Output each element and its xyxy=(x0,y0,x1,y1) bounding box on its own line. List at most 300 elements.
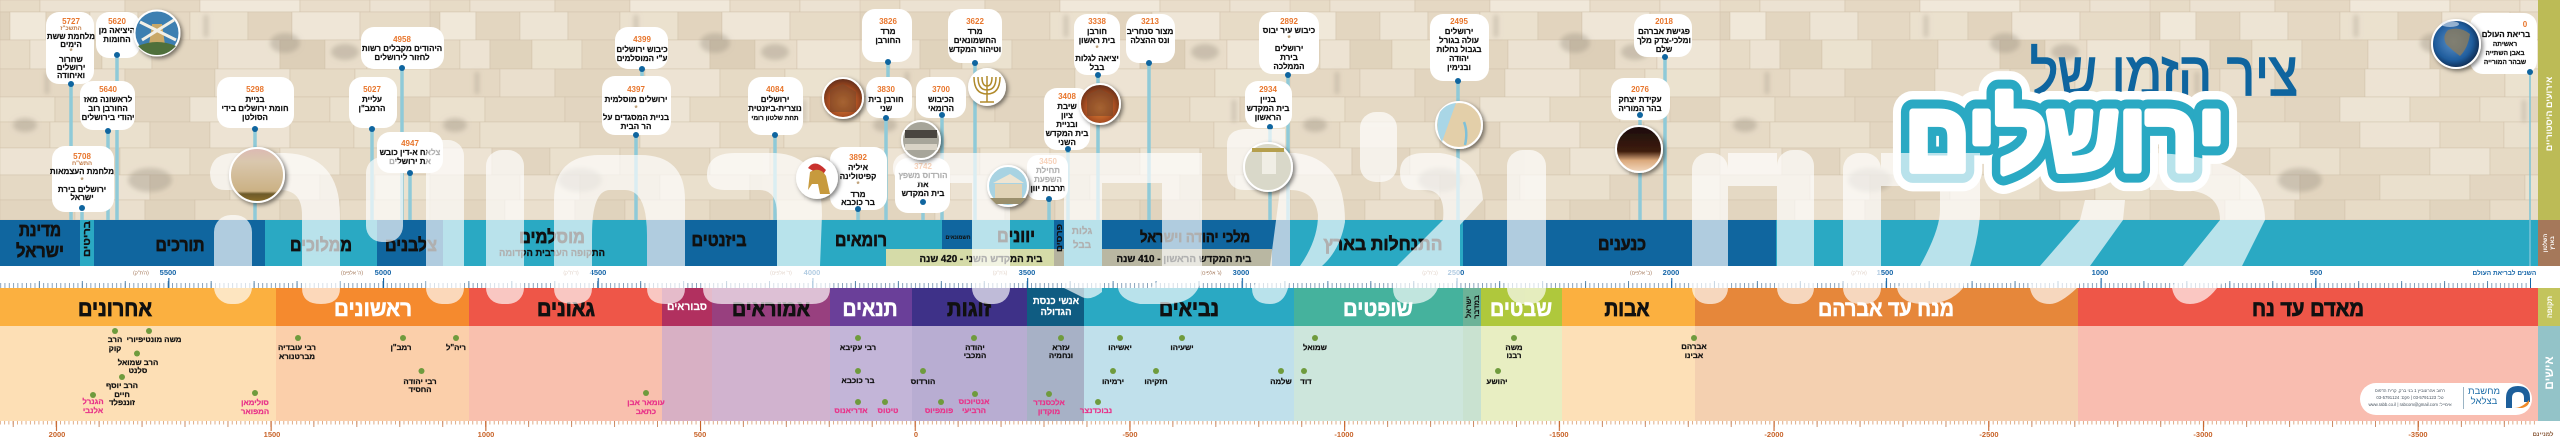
ruler labels on band: התנחלות בארץ xyxy=(1324,234,1442,254)
callout 3826: 3826 xyxy=(879,17,897,26)
ruler: years since creation: (ב' אלפים) xyxy=(1630,270,1652,276)
callout 3826: מרד xyxy=(880,27,896,36)
ruler: common era years: -2000 xyxy=(1764,430,1784,439)
personalities: הרביעי xyxy=(962,406,986,415)
ruler: years since creation: 1500 xyxy=(1877,268,1893,277)
callout 3742: את xyxy=(917,180,929,189)
title word: ירושלים: ירושלים xyxy=(1905,84,2225,191)
icon: roman helmet xyxy=(796,157,838,199)
ruler labels on band: בית המקדש הראשון - 410 שנה xyxy=(1116,254,1252,265)
icon: city wall photo xyxy=(230,148,284,202)
callout 3213 xyxy=(1126,14,1175,66)
callout 4947: צלאח א-דין כובש xyxy=(380,148,441,157)
ruler: common era years: 2000 xyxy=(49,430,65,439)
personalities: יאשיהו xyxy=(1108,343,1132,352)
callout 0 xyxy=(2470,13,2537,75)
callout 0: באבן השתייה xyxy=(2486,50,2524,57)
personalities: משה מונטיפיורי xyxy=(127,335,182,344)
callout 3892: איליה xyxy=(848,163,869,172)
icon: windmill xyxy=(134,10,180,56)
callout 5620: החומות xyxy=(103,35,131,44)
ruler: common era years: 0 xyxy=(914,430,918,439)
callout 5727: שחרור xyxy=(59,55,83,64)
ruler labels on band: רומאים xyxy=(835,230,887,250)
callout 2892: ירושלים xyxy=(1275,44,1303,53)
side label column: בארץ xyxy=(2550,236,2556,250)
callout 2892 xyxy=(1259,12,1319,78)
callout 4084: 4084 xyxy=(766,85,784,94)
icon: binding of Isaac fire xyxy=(1616,126,1662,172)
callout 2934 xyxy=(1245,81,1292,130)
callout 5027: הרמב"ן xyxy=(359,104,385,113)
callout 5727: ואיחודה xyxy=(57,71,85,80)
band: periods: במדבר xyxy=(1472,295,1481,319)
callout 3408: השני xyxy=(1058,138,1076,147)
callout 5708: מלחמת העצמאות xyxy=(50,167,114,176)
callout 4958: לחזור לירושלים xyxy=(374,53,430,62)
ruler labels on band: התקופה הערבית הקדומה xyxy=(499,248,605,259)
callout 5620: היציאה מן xyxy=(99,26,135,35)
callout 5298: הסולטן xyxy=(242,113,268,122)
ruler: common era years: 1500 xyxy=(264,430,280,439)
callout 5640: יהודי בירושלים xyxy=(82,113,134,122)
ruler labels on band: גלות xyxy=(1072,225,1092,237)
callout 3700: הכיבוש xyxy=(928,95,954,104)
icon: burning temple small xyxy=(823,78,863,118)
personalities: קוק xyxy=(109,344,121,353)
ruler: years since creation: 4000 xyxy=(804,268,820,277)
ruler labels on band: יוונים xyxy=(997,226,1035,246)
title: ציר הזמן של ירושלים xyxy=(1905,40,2298,191)
callout 3622: וטיהור המקדש xyxy=(949,45,1001,54)
callout 2076 xyxy=(1611,78,1670,120)
band: periods: אמוראים xyxy=(732,296,810,321)
ruler: years since creation: (ד'ת"ק) xyxy=(563,270,579,276)
background: giant translucent watermark letters xyxy=(210,112,2265,304)
personalities: יהושע xyxy=(1487,377,1507,386)
callout 2495: ובנימין xyxy=(1447,63,1471,72)
ruler labels on band: בריטים xyxy=(82,220,93,257)
callout 3450: השפעת xyxy=(1034,175,1062,184)
personalities: רבי עובדיה xyxy=(278,343,316,352)
callout 2934: בניין xyxy=(1260,95,1276,104)
callout 3338: חורבן xyxy=(1087,27,1107,36)
personalities: ריה"ל xyxy=(446,343,466,352)
callout 2076: 2076 xyxy=(1631,85,1649,94)
ruler: years since creation: (ד' אלפים) xyxy=(770,270,792,276)
callout 2934: 2934 xyxy=(1259,85,1277,94)
callout 3622: מרד xyxy=(967,27,983,36)
callout 5298: חומת ירושלים בידי xyxy=(221,104,289,113)
callout 2076: בהר המוריה xyxy=(1618,104,1662,113)
callout 2018: 2018 xyxy=(1655,17,1673,26)
ruler: years since creation: 3500 xyxy=(1019,268,1035,277)
callout 5727: מלחמת ששת xyxy=(47,32,95,41)
callout 3338: * xyxy=(1095,44,1099,53)
ruler: years since creation xyxy=(0,266,2552,288)
callout 4399 xyxy=(615,27,668,72)
band: periods: ישראל xyxy=(1464,296,1473,318)
callout 5640: החורבן רוב xyxy=(88,104,128,113)
callout 3826: החורבן xyxy=(875,36,901,45)
personalities: אדריאנוס xyxy=(834,406,868,415)
callout 2495: יהודה xyxy=(1449,54,1469,63)
callout 3892: בר כוכבא xyxy=(841,198,875,207)
callout 5708: * xyxy=(80,176,84,185)
ruler: years since creation: 1000 xyxy=(2092,268,2108,277)
callout 4397: ירושלים מוסלמית xyxy=(605,95,667,104)
icon: burning temple xyxy=(1080,84,1120,124)
personalities: הגנרל xyxy=(82,397,104,406)
icon: temple relief xyxy=(902,121,940,159)
callout 4397: 4397 xyxy=(627,85,645,94)
band: periods: הגדולה xyxy=(1040,307,1072,318)
personalities: ישעיהו xyxy=(1170,343,1194,352)
callout 2495: 2495 xyxy=(1450,17,1468,26)
callout 2495: בגבול נחלות xyxy=(1436,45,1482,54)
callout 0: בריאת העולם xyxy=(2482,30,2530,39)
personalities: פומפיוס xyxy=(925,406,953,415)
callout 5620: 5620 xyxy=(108,17,126,26)
band: periods: מאדם עד נח xyxy=(2252,296,2364,321)
band: periods: אבות xyxy=(1604,296,1650,321)
band: periods: ראשונים xyxy=(334,296,412,321)
ruler labels on band: ישראל xyxy=(16,241,64,261)
callout 4084: נוצרית-ביזנטית xyxy=(748,104,802,113)
band: ruling powers xyxy=(0,220,2538,266)
personalities: עזרא xyxy=(1052,343,1070,352)
callout 5727: הימים xyxy=(60,40,82,49)
callout 3408: 3408 xyxy=(1058,92,1076,101)
callout 3892: קפיטולינה xyxy=(840,172,876,181)
ruler: years since creation: 5500 xyxy=(160,268,176,277)
ruler labels on band: מוסלמים xyxy=(519,227,585,247)
callout 3450: 3450 xyxy=(1039,157,1057,166)
callout 5640: לראשונה מאז xyxy=(84,95,133,104)
personalities: ונחמיה xyxy=(1049,351,1073,360)
personalities: כתאב xyxy=(636,407,656,416)
personalities: ירמיהו xyxy=(1102,377,1124,386)
callout 5027 xyxy=(349,77,397,132)
event connector lines xyxy=(71,55,1665,220)
ruler: years since creation: 3000 xyxy=(1233,268,1249,277)
callout 5727: * xyxy=(69,47,73,56)
band: periods: גאונים xyxy=(537,296,595,321)
callout 4399: 4399 xyxy=(633,35,651,44)
band: periods: סבוראים xyxy=(667,301,707,313)
callout 5727: התשכ"ז xyxy=(60,26,82,32)
callout 3622: החשמונאים xyxy=(954,36,996,45)
callout 3622 xyxy=(948,9,1002,66)
callout 2934: בית המקדש xyxy=(1247,104,1289,113)
callout 3408: בית המקדש xyxy=(1046,129,1088,138)
callout 2076: עקידת יצחק xyxy=(1618,95,1662,104)
callout 3408: ובניית xyxy=(1056,120,1078,129)
icon: greek temple xyxy=(988,166,1028,206)
personalities: שלמה xyxy=(1270,377,1292,386)
callout 5027: עליית xyxy=(362,95,382,104)
ruler labels on band: מדינת xyxy=(19,220,61,240)
side label column: תקופה xyxy=(2545,296,2554,318)
ruler: years since creation: (ג' אלפים) xyxy=(1200,270,1222,276)
callout 3826 xyxy=(862,9,912,65)
callout 2018 xyxy=(1634,14,1692,60)
callout 3338: יציאה לגלות xyxy=(1075,54,1119,63)
callout 3742: 3742 xyxy=(914,162,932,171)
personalities: מוקדון xyxy=(1038,407,1061,416)
callout 4947: 4947 xyxy=(401,139,419,148)
icon: menorah xyxy=(968,68,1006,106)
logo name: מחשבת xyxy=(2468,386,2500,397)
callout 2018: שלם xyxy=(1656,45,1673,54)
band: periods: שופטים xyxy=(1343,296,1413,321)
personalities: זוננפלד xyxy=(109,398,135,407)
icon: first temple illustration xyxy=(1244,143,1292,191)
ruler: years since creation: (ה' אלפים) xyxy=(341,270,363,276)
personalities: הרב xyxy=(108,335,122,344)
callout 3213: מצור סנחריב xyxy=(1127,27,1173,36)
callout 3830 xyxy=(866,77,912,121)
ruler labels on band: פרסים xyxy=(1055,224,1064,252)
personalities: יהודה xyxy=(965,343,985,352)
side label column: השלטון xyxy=(2542,234,2549,252)
callout 3622: 3622 xyxy=(966,17,984,26)
ruler: years since creation: 5000 xyxy=(375,268,391,277)
callout 4399: כיבוש ירושלים xyxy=(616,45,668,54)
callout 3742 xyxy=(895,158,950,213)
callout 3700: 3700 xyxy=(932,85,950,94)
personalities: אברהם xyxy=(1681,342,1707,351)
ruler labels on band: צלבנים xyxy=(385,235,437,255)
personalities: אלכסנדר xyxy=(1033,398,1065,407)
ruler labels on band: ממלוכים xyxy=(290,235,352,255)
callout 5708 xyxy=(50,146,114,212)
ruler: common era years: למניינם xyxy=(2533,430,2554,438)
callout 4958: 4958 xyxy=(393,35,411,44)
logo box: Machshevet Bezalel xyxy=(2360,383,2532,415)
ruler labels on band: ביזנטים xyxy=(692,230,746,250)
personalities: סולימאן xyxy=(241,398,269,407)
ruler: common era years: -1500 xyxy=(1549,430,1569,439)
callout 4397: * xyxy=(634,104,638,113)
icon: earth globe xyxy=(2432,20,2480,68)
title word: ירושלים: ירושלים xyxy=(1905,84,2225,191)
callout 3892 xyxy=(830,147,887,212)
personalities: עומאר אבן xyxy=(627,398,665,407)
callout 2018: ומלכי-צדק מלך xyxy=(1637,36,1691,45)
callout 3450: תחילת xyxy=(1036,166,1060,175)
personalities: הורדוס xyxy=(911,377,935,386)
icon: map of Israel xyxy=(1436,102,1482,148)
callout 4947: את ירושלים xyxy=(389,157,431,166)
ruler labels on band xyxy=(16,220,1646,265)
ruler labels on band: מלכי יהודה וישראל xyxy=(1140,229,1250,246)
personalities: חזקיהו xyxy=(1144,377,1168,386)
callout 2892: 2892 xyxy=(1280,17,1298,26)
ruler: common era years: -3000 xyxy=(2193,430,2213,439)
ruler: years since creation: 500 xyxy=(2310,268,2322,277)
ruler: years since creation: (ה'ת"ק) xyxy=(133,270,149,276)
side label column: אישים xyxy=(2542,356,2556,390)
callout 2892: הממלכה xyxy=(1273,62,1305,71)
ruler: common era years xyxy=(0,421,2554,448)
band: periods: זוגות xyxy=(947,296,991,321)
personalities: הרב יוסף xyxy=(106,381,138,390)
callout 3892: * xyxy=(856,180,860,189)
personalities: החסיד xyxy=(408,385,432,394)
callout 4397: הר הבית xyxy=(621,122,651,131)
callout 0: שבהר המורייה xyxy=(2484,59,2526,66)
ruler labels on band: בית המקדש השני - 420 שנה xyxy=(920,254,1043,265)
callout 2495 xyxy=(1430,14,1489,84)
callout 3892: מרד xyxy=(850,190,866,199)
personalities: הרב שמואל xyxy=(118,358,158,367)
callout 3742: הורדוס משפץ xyxy=(898,171,948,180)
callout 3338: בבל xyxy=(1090,63,1104,72)
personalities: שמואל xyxy=(1303,343,1327,352)
band: periods: שבטים xyxy=(1490,296,1552,321)
ruler: common era years: 1000 xyxy=(478,430,494,439)
ruler: common era years: -500 xyxy=(1122,430,1138,439)
callout 3338 xyxy=(1074,14,1120,78)
personalities: רבי עקיבא xyxy=(840,343,876,352)
title line: ציר הזמן של: ציר הזמן של xyxy=(2030,40,2298,109)
personalities: נבוכדנצר xyxy=(1080,406,1112,415)
personalities: אבינו xyxy=(1685,351,1704,360)
ruler labels on band: תורכים xyxy=(156,235,204,255)
callout 4958: היהודים מקבלים רשות xyxy=(362,44,442,53)
callout 5708: ירושלים בירת xyxy=(58,185,106,194)
callout 2495: עולה בגורל xyxy=(1439,36,1479,45)
ruler labels on band: חשמונאים xyxy=(946,235,970,241)
callout 5640: 5640 xyxy=(99,85,117,94)
event callouts xyxy=(46,9,2537,213)
personalities: רמב"ן xyxy=(391,343,411,352)
callout 5708: 5708 xyxy=(73,152,91,161)
ruler: years since creation: 2500 xyxy=(1448,268,1464,277)
callout 3213: ונס ההצלה xyxy=(1130,36,1170,45)
personalities xyxy=(82,328,1707,416)
callout 5298: 5298 xyxy=(246,85,264,94)
ruler: years since creation: 4500 xyxy=(590,268,606,277)
ruler: years since creation: מניין השנים לבריאת העולם xyxy=(2473,269,2552,277)
callout 5640 xyxy=(80,81,135,134)
personalities: אנטיוכוס xyxy=(959,397,990,406)
callout 5727: 5727 xyxy=(62,17,80,26)
ruler labels on band: כנענים xyxy=(1598,234,1646,254)
personalities: בר כוכבא xyxy=(842,376,874,385)
ruler: years since creation: 2000 xyxy=(1663,268,1679,277)
temple bands xyxy=(886,249,1272,266)
logo contact text xyxy=(2368,388,2452,407)
band: personalities background xyxy=(0,326,2538,421)
callout 3338: בית ראשון xyxy=(1079,36,1115,45)
callout 5298: בניית xyxy=(246,95,264,104)
logo mark xyxy=(2506,386,2530,408)
personalities: טיטוס xyxy=(878,406,898,415)
callout 5727 xyxy=(46,12,95,87)
band: periods: אנשי כנסת xyxy=(1033,296,1080,307)
logo contact text: טל: 03-5791123 | פקס: 03-5791124 xyxy=(2376,395,2444,400)
ruler: common era years: 500 xyxy=(694,430,706,439)
callout 2018: פגישת אברהם xyxy=(1638,27,1690,36)
logo contact text: רחוב אהרונוביץ 1 בני ברק, קרית הדפוס xyxy=(2375,388,2445,393)
callout 0: ראשיתה xyxy=(2493,41,2517,48)
personalities: רבי יהודה xyxy=(403,377,437,386)
side label column: אירועים היסטוריים xyxy=(2544,77,2554,151)
ruler: common era years: -2500 xyxy=(1979,430,1999,439)
personalities: חיים xyxy=(114,390,130,399)
background: stone wall xyxy=(0,0,2538,220)
callout 2892: * xyxy=(1287,34,1291,43)
logo name xyxy=(2468,386,2500,407)
band: periods: אחרונים xyxy=(78,296,152,321)
ruler: common era years: -1000 xyxy=(1334,430,1354,439)
personalities: אלנבי xyxy=(83,406,104,415)
ruler: years since creation: (ג'ת"ק) xyxy=(993,270,1008,276)
personalities: המפואר xyxy=(241,407,269,416)
callout 3408 xyxy=(1044,88,1090,152)
callout 3742: בית המקדש xyxy=(902,189,944,198)
callout 3450 xyxy=(1027,155,1068,202)
personalities: משה xyxy=(1505,343,1523,352)
callout 4084: ירושלים xyxy=(761,95,789,104)
callout 4947 xyxy=(377,132,443,176)
callout 3830: חורבן בית xyxy=(868,95,904,104)
callout 5708: ישראל xyxy=(70,193,94,202)
ruler: years since creation: (א'ת"ק) xyxy=(1851,270,1867,276)
title word: ירושלים: ירושלים xyxy=(1905,84,2225,191)
callout 3830: שני xyxy=(880,104,893,113)
callout 0: 0 xyxy=(2523,20,2528,29)
ruler labels on band: בבל xyxy=(1073,239,1092,251)
band: periods xyxy=(0,288,2538,326)
callout 3892: 3892 xyxy=(849,153,867,162)
callout 2892: כיבוש עיר יבוס xyxy=(1263,26,1315,35)
personalities: סלנט xyxy=(129,366,148,375)
callout 2495: ירושלים xyxy=(1445,27,1473,36)
band: periods: תנאים xyxy=(842,296,898,321)
callout 3338: 3338 xyxy=(1088,17,1106,26)
callout 4958 xyxy=(361,27,444,71)
callout 3830: 3830 xyxy=(877,85,895,94)
callout 3213: 3213 xyxy=(1141,17,1159,26)
callout 5027: 5027 xyxy=(363,85,381,94)
callout 5620 xyxy=(96,12,140,58)
callout 3700: הרומאי xyxy=(928,104,954,113)
callout 3700 xyxy=(916,77,966,118)
callout 3408: ציון xyxy=(1061,111,1073,120)
ruler: common era years: -3500 xyxy=(2408,430,2428,439)
personalities: רבנו xyxy=(1507,351,1521,360)
ruler: years since creation: (ב'ת"ק) xyxy=(1422,270,1438,276)
personalities: המכבי xyxy=(964,351,986,360)
callout 4084: תחת שלטון רומי xyxy=(751,114,799,122)
callout 2934: הראשון xyxy=(1255,113,1281,122)
callout 3408: שיבת xyxy=(1057,102,1077,111)
band: periods: מנח עד אברהם xyxy=(1818,296,1954,321)
personalities: דוד xyxy=(1300,377,1312,386)
callout 5708: התש"ח xyxy=(72,161,92,167)
personalities: מברטנורא xyxy=(279,352,315,361)
band: periods: נביאים xyxy=(1159,296,1219,321)
callout 4084 xyxy=(748,77,803,138)
callout 5298 xyxy=(217,77,294,132)
callout 4397 xyxy=(602,76,671,138)
callout 5727: ירושלים xyxy=(57,63,85,72)
callout 3450: תרבות יוון xyxy=(1030,184,1066,193)
logo contact text: www.rabb.co.il | rabcom@gmail.com :אימייל xyxy=(2368,402,2452,407)
